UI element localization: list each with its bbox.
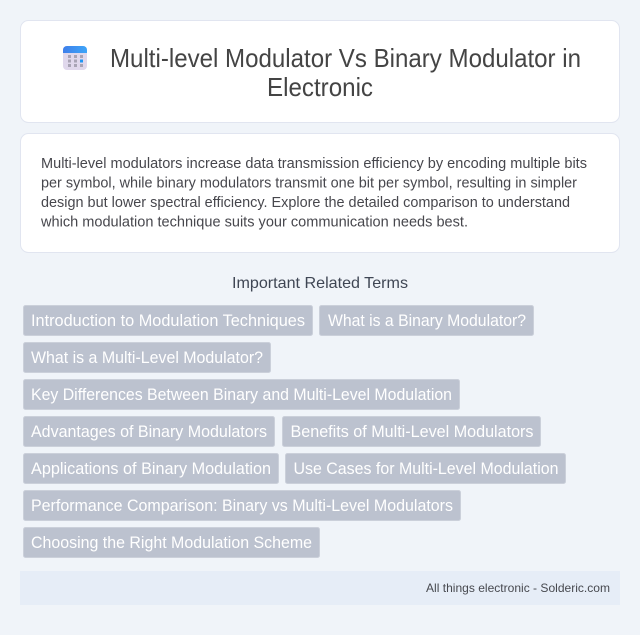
text block: description: Multi-level modulators increase data transmission efficiency by encoding multiple bits <box>41 156 587 172</box>
chip: key differences: Key Differences Between Binary and Multi-Level Modulation <box>31 386 452 404</box>
chip: introduction: Introduction to Modulation Techniques <box>31 312 305 330</box>
text block: description <box>40 156 587 230</box>
footer <box>20 571 620 605</box>
title: Multi-level Modulator Vs Binary Modulator in <box>110 43 581 73</box>
chip: key differences <box>24 380 460 410</box>
chip: use cases <box>286 454 566 484</box>
chip: binary modulator: What is a Binary Modulator? <box>328 312 526 330</box>
chip: performance <box>24 490 460 520</box>
icon: calendar <box>63 46 87 70</box>
chip: use cases: Use Cases for Multi-Level Modulation <box>294 460 558 478</box>
chip: binary modulator <box>320 306 534 336</box>
term chips <box>24 306 566 558</box>
panel: description <box>20 134 620 252</box>
chip: benefits <box>282 416 540 446</box>
heading: important related terms: Important Related Terms <box>232 275 408 292</box>
chip: applications <box>24 454 278 484</box>
chip: advantages <box>24 416 274 446</box>
text block: description: design but lower spectral efficiency. Explore the detailed comparison to understand <box>41 195 570 211</box>
chip: multi-level modulator <box>24 342 270 372</box>
chip: advantages: Advantages of Binary Modulators <box>31 423 267 441</box>
chip: introduction <box>24 306 312 336</box>
title: Electronic <box>267 72 373 102</box>
title <box>110 43 581 102</box>
text block: description: which modulation technique suits your communication needs best. <box>40 214 468 230</box>
chip: choosing <box>24 528 320 558</box>
chip: performance: Performance Comparison: Binary vs Multi-Level Modulators <box>31 497 453 515</box>
chip: multi-level modulator: What is a Multi-Level Modulator? <box>31 349 263 367</box>
chip: choosing: Choosing the Right Modulation Scheme <box>31 534 312 552</box>
chip: applications: Applications of Binary Modulation <box>31 460 271 478</box>
text block: description: per symbol, while binary modulators transmit one bit per symbol, resulting in simpler <box>41 176 577 192</box>
chip: benefits: Benefits of Multi-Level Modulators <box>290 423 534 441</box>
footer: All things electronic - Solderic.com <box>426 581 610 595</box>
panel: title card <box>20 20 620 122</box>
